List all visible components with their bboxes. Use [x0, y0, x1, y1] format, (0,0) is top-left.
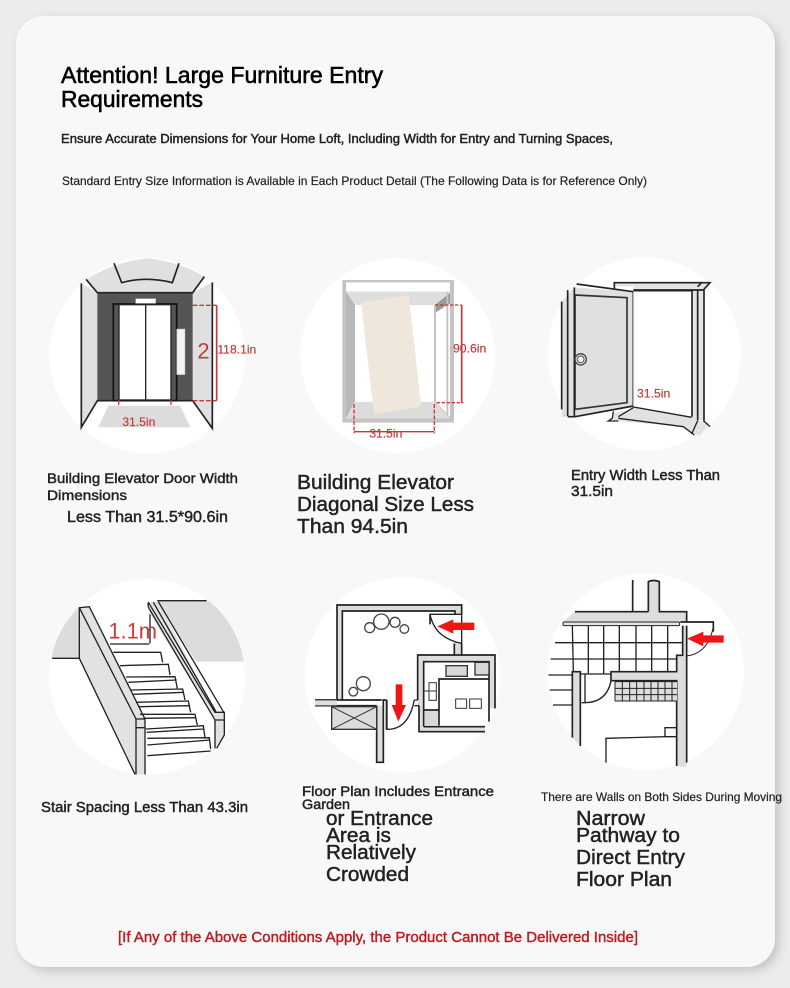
footer warning: [If Any of the Above Conditions Apply, the Product Cannot Be Delivered Inside]	[118, 930, 638, 946]
label: narrow pathway: Narrow	[576, 808, 646, 830]
label: narrow pathway: Floor Plan	[576, 869, 672, 891]
label: entrance garden	[302, 783, 494, 886]
icon: elevator front view	[50, 258, 256, 453]
intro text: Ensure Accurate Dimensions for Your Home Loft, Including Width for Entry and Turning Spaces,	[61, 132, 613, 146]
label: narrow pathway: Pathway to	[576, 825, 680, 847]
label: elevator diagonal: Building Elevator	[297, 472, 454, 494]
intro text	[61, 132, 647, 188]
label: entrance garden: Garden	[302, 796, 350, 812]
label: elevator diagonal: Than 94.5in	[297, 516, 408, 538]
icon: elevator cabin with panel: 31.5in	[369, 428, 402, 441]
label: entrance garden: Area is	[326, 825, 391, 847]
icon: open door	[548, 257, 741, 451]
title	[61, 62, 383, 112]
icon: elevator cabin with panel	[300, 258, 495, 453]
panel: stair spacing	[41, 600, 248, 816]
label: elevator door width: Less Than 31.5*90.6in	[67, 509, 228, 526]
label: entrance garden: Crowded	[326, 864, 409, 886]
icon: staircase: 1.1m	[108, 619, 157, 644]
label: stair spacing: Stair Spacing Less Than 43.3in	[41, 800, 248, 816]
panel: narrow pathway floor plan	[541, 573, 782, 891]
panel: elevator diagonal	[297, 258, 495, 538]
title: Attention! Large Furniture Entry	[61, 62, 383, 88]
label: elevator door width	[47, 470, 238, 526]
label: elevator door width: Building Elevator Door Width	[47, 470, 238, 486]
icon: elevator front view: 31.5in	[122, 416, 155, 429]
icon: elevator front view: 2	[197, 339, 210, 364]
icon: staircase	[52, 600, 244, 775]
label: entry width	[571, 468, 720, 500]
label: narrow pathway: Direct Entry	[576, 847, 685, 869]
label: entrance garden: Relatively	[326, 842, 416, 864]
panel: elevator door width	[47, 258, 256, 526]
title: Requirements	[61, 86, 203, 112]
arrow: side entry	[437, 619, 474, 634]
icon: elevator front view: 118.1in	[217, 344, 256, 357]
label: elevator diagonal: Diagonal Size Less	[297, 494, 474, 516]
panel: entry width	[548, 257, 741, 500]
label: elevator door width: Dimensions	[47, 487, 127, 503]
icon: elevator cabin with panel: 90.6in	[453, 342, 486, 355]
panel: entrance garden floor plan	[302, 577, 500, 886]
label: entrance garden: Floor Plan Includes Entrance	[302, 783, 494, 799]
label: entry width: Entry Width Less Than	[571, 468, 720, 484]
icon: narrow pathway floor plan	[547, 573, 744, 770]
icon: open door: 31.5in	[637, 388, 670, 401]
arrow: entry direction	[687, 632, 724, 646]
intro text: Standard Entry Size Information is Available in Each Product Detail (The Following Data is for Reference Only)	[62, 174, 647, 188]
label: entry width: 31.5in	[571, 484, 613, 500]
label: elevator diagonal	[297, 472, 474, 538]
label: entrance garden: or Entrance	[326, 808, 433, 830]
label: narrow pathway: There are Walls on Both Sides During Moving	[541, 790, 782, 804]
icon: floor plan with entrance garden	[305, 577, 500, 773]
arrow: front entry	[392, 684, 406, 722]
label: narrow pathway	[541, 790, 782, 891]
